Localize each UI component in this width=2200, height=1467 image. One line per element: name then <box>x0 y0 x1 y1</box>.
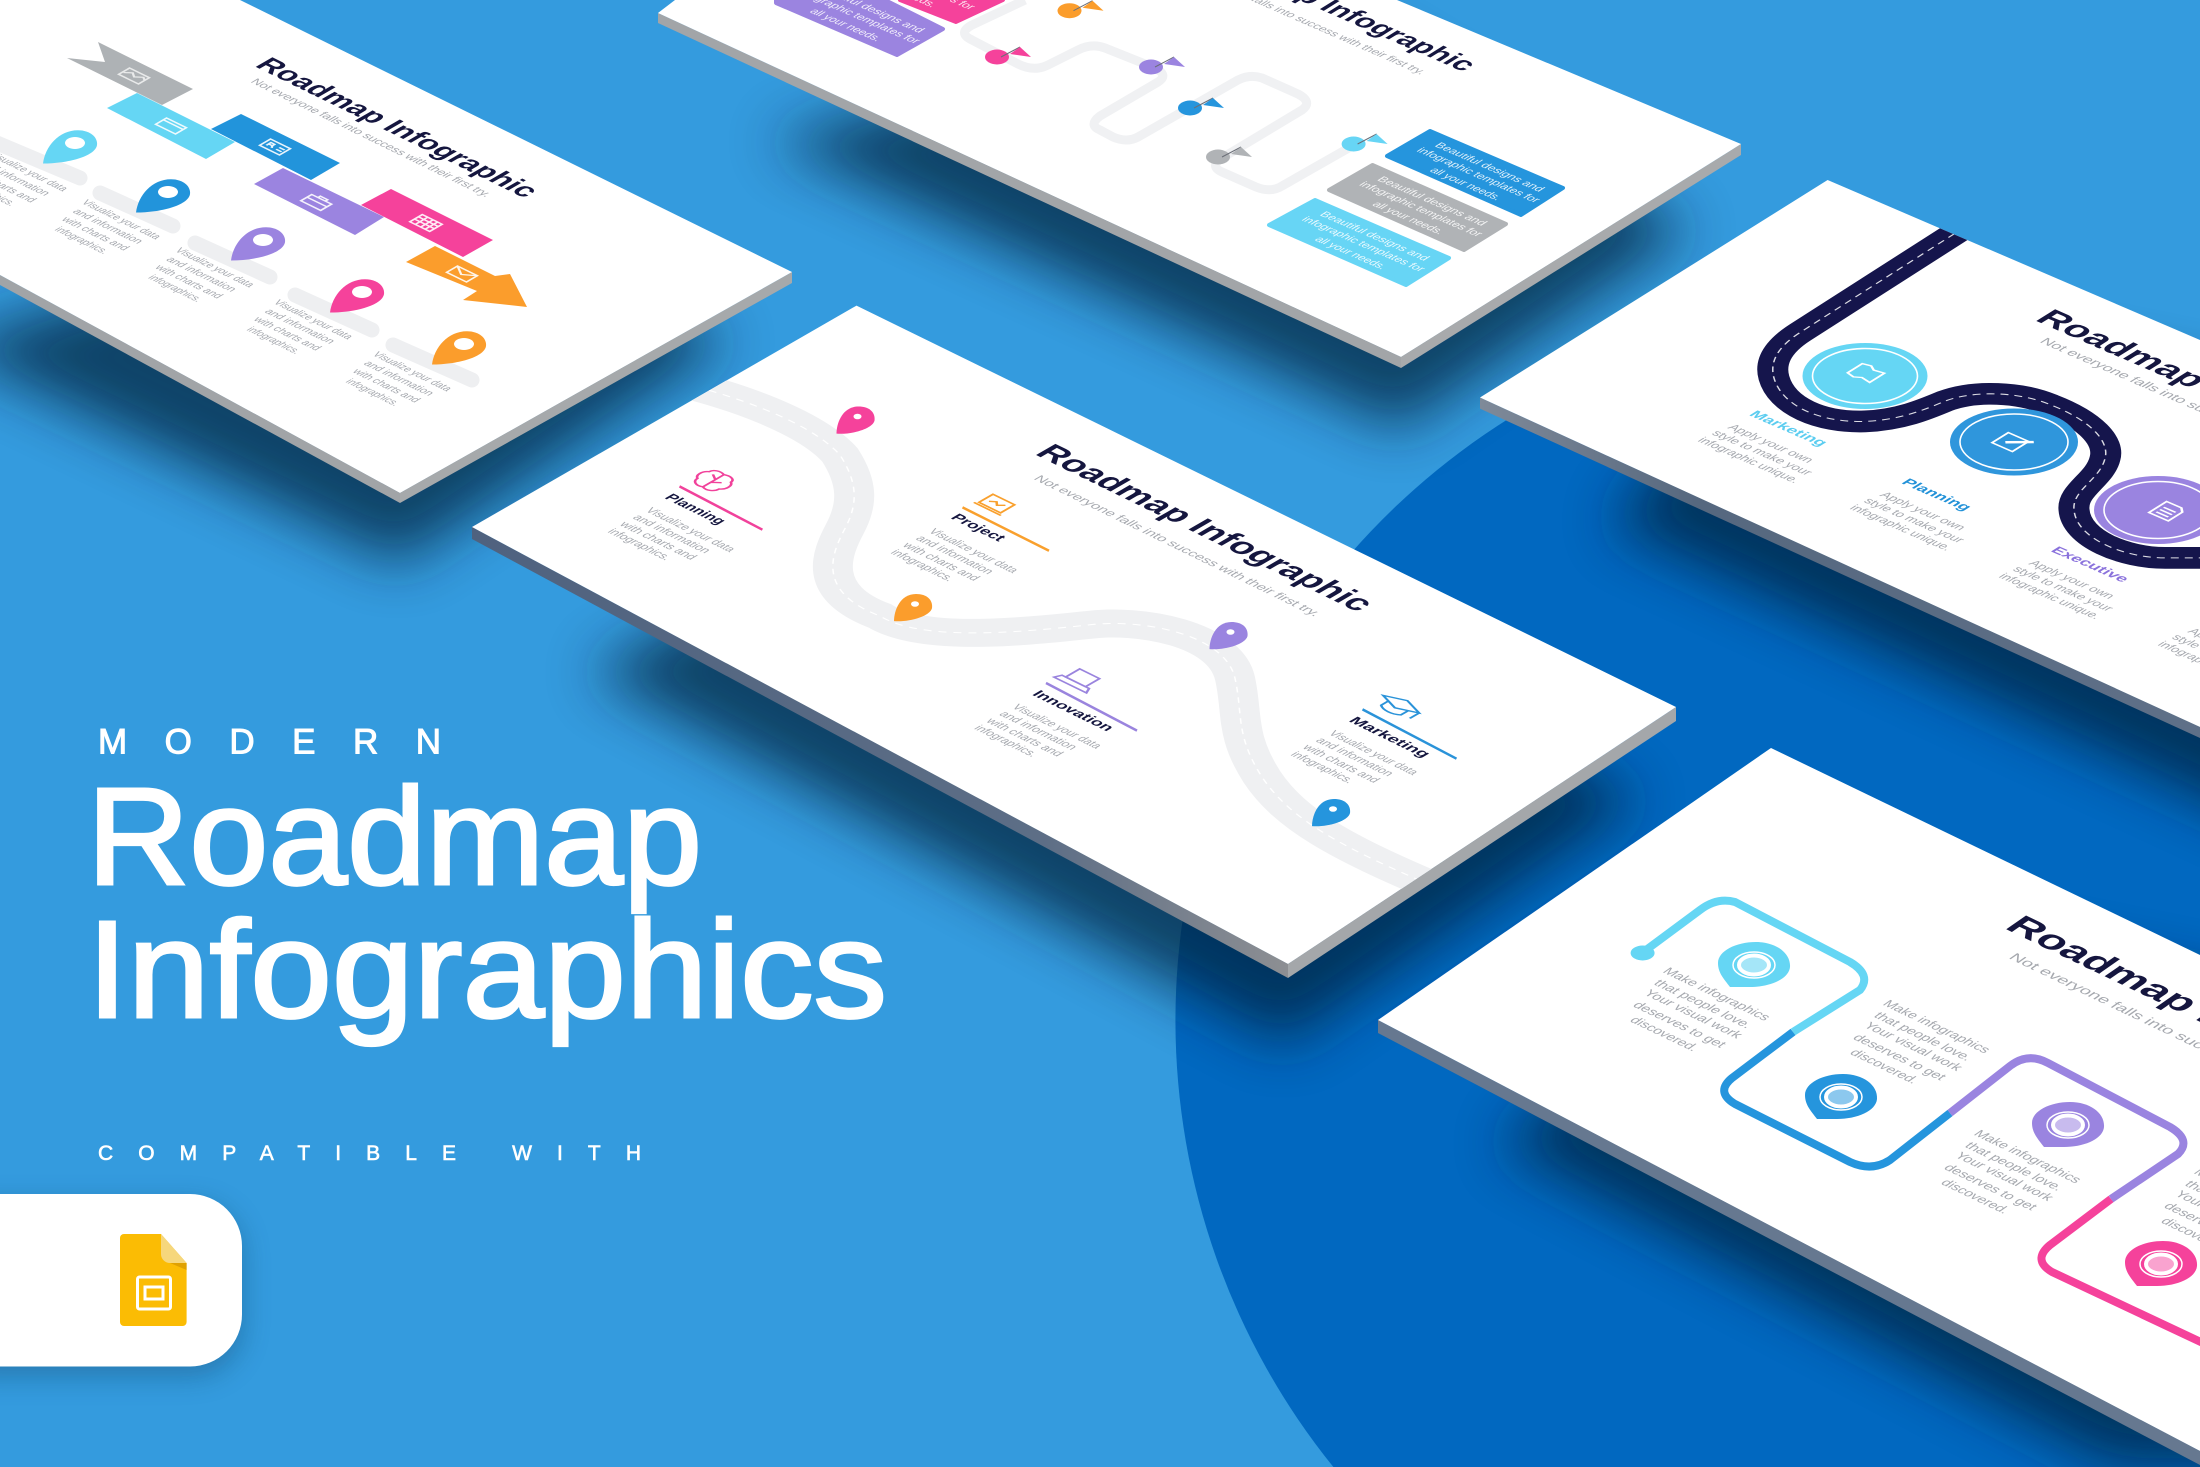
step text blocks: Visualize your data <box>370 350 456 393</box>
step text blocks: with charts and <box>58 214 133 252</box>
panel: right road slide <box>1480 180 2200 738</box>
box captions: infographic templates for <box>1356 180 1486 238</box>
step: innovation: infographics. <box>971 723 1042 759</box>
step text blocks: deserves to get <box>1630 999 1730 1050</box>
step: innovation: Innovation <box>1028 688 1118 733</box>
step labels and text: style to make your <box>2010 564 2118 613</box>
step text blocks: that people love. <box>1871 1010 1977 1063</box>
step text blocks: discovered. <box>1847 1047 1923 1086</box>
step text blocks: deserves to get <box>1941 1162 2041 1212</box>
step labels and text: infographic unique. <box>1847 503 1956 552</box>
upper text boxes <box>776 0 1003 55</box>
step text blocks: Your visual work <box>1861 1020 1967 1073</box>
step text blocks: discovered. <box>1938 1177 2014 1216</box>
step: marketing: Marketing <box>1345 715 1434 760</box>
step: project: infographics. <box>888 547 958 583</box>
step: innovation: and information <box>996 709 1081 752</box>
box captions: all your needs. <box>1369 200 1448 236</box>
step circle: marketing <box>1802 343 1928 409</box>
step: marketing: and information <box>1313 735 1398 778</box>
main title <box>87 760 887 1047</box>
box captions: Beautiful designs and <box>1317 210 1433 262</box>
step: innovation: Visualize your data <box>1009 702 1107 751</box>
step text blocks: with charts and <box>151 262 227 300</box>
box captions: Beautiful designs and <box>1374 175 1490 227</box>
box captions: Beautiful designs and <box>1432 141 1548 193</box>
step labels and text: style to make your <box>1709 428 1817 477</box>
route start dot <box>1631 946 1655 960</box>
step circle: planning <box>1950 408 2078 476</box>
step: planning: with charts and <box>616 519 701 562</box>
step text blocks: and information <box>70 207 147 246</box>
step text blocks <box>0 150 456 408</box>
step: planning: and information <box>630 512 715 555</box>
step circle: executive <box>2094 476 2200 544</box>
road pins <box>836 407 1350 826</box>
step: project: Project <box>947 512 1009 544</box>
box captions: infographic templates for <box>1299 215 1429 273</box>
step: marketing: with charts and <box>1299 742 1384 785</box>
step text blocks: Visualize your data <box>172 246 258 289</box>
dark blue circle <box>1175 311 2200 1467</box>
box captions: all your needs. <box>1427 166 1505 202</box>
step text blocks: and information <box>361 359 438 398</box>
eyebrow: modern: MODERN <box>98 722 441 762</box>
step text blocks: with charts and <box>250 314 325 352</box>
icon: google slides <box>120 1234 187 1326</box>
step text blocks: deserves to get <box>1850 1032 1950 1082</box>
step: marketing: infographics. <box>1288 749 1358 785</box>
main title: Infographics <box>87 893 887 1047</box>
box captions: infographic templates for <box>1414 146 1544 204</box>
step: innovation <box>971 666 1137 759</box>
logo card <box>0 1194 242 1366</box>
step text blocks: infographics. <box>145 273 206 304</box>
step: planning: Planning <box>661 492 730 527</box>
step labels and text: style to make your <box>1861 496 1969 545</box>
location markers <box>1718 942 2197 1286</box>
panel: center winding road slide <box>472 306 1676 978</box>
step text blocks: that people love. <box>1962 1140 2068 1193</box>
step text blocks: and information <box>262 307 339 346</box>
step text blocks: Make infographics <box>1971 1128 2086 1185</box>
step: planning <box>605 467 762 562</box>
step text blocks: with charts and <box>349 366 424 404</box>
step labels and text: Apply your own <box>1877 490 1969 532</box>
ribbon icons <box>119 68 477 282</box>
flags <box>985 1 1388 165</box>
slide subtitle: Not everyone falls into success with their first try. <box>248 77 495 199</box>
step labels and text: Executive <box>2047 545 2133 585</box>
slide surface and edges <box>1480 180 2200 738</box>
step text blocks <box>1627 965 2200 1254</box>
step text blocks: and information <box>163 255 240 294</box>
winding road <box>695 386 1440 889</box>
panel: top-left ribbon roadmap slide <box>0 0 792 503</box>
step labels and text <box>1695 409 2200 689</box>
step text blocks: that people love. <box>1651 977 1757 1030</box>
step labels and text: Apply your own <box>2026 558 2118 601</box>
step text blocks: discovered. <box>1627 1014 1703 1053</box>
slide title: Roadmap Infographic <box>1027 440 1383 616</box>
navy road <box>1773 220 2200 558</box>
winding route <box>964 0 1354 190</box>
box captions <box>794 0 1548 273</box>
step: marketing <box>1288 692 1456 785</box>
step: marketing: Visualize your data <box>1326 728 1423 777</box>
ribbon chain <box>67 42 527 307</box>
slide surface and edges <box>1378 748 2200 1465</box>
logo card shadow <box>0 1204 242 1376</box>
step text blocks: Make infographics <box>1660 965 1775 1023</box>
step labels and text: infographic unique. <box>1695 435 1804 485</box>
step text blocks: infographics. <box>244 325 305 356</box>
step: project: and information <box>913 533 998 576</box>
step: planning: infographics. <box>605 526 675 562</box>
main title: Roadmap <box>87 760 702 914</box>
box captions: all your needs. <box>1312 235 1390 271</box>
step: project: with charts and <box>899 540 984 583</box>
step text blocks: infographics. <box>52 225 113 256</box>
gray route bars <box>0 140 472 380</box>
panel: top flag roadmap slide <box>658 0 1741 368</box>
slide surface and edges <box>0 0 792 503</box>
slide title: Roadmap Infographic <box>248 54 546 202</box>
step: planning: Visualize your data <box>643 505 740 554</box>
step: project: Visualize your data <box>926 526 1023 575</box>
step text blocks: Visualize your data <box>271 298 357 341</box>
step labels and text: Planning <box>1898 477 1975 513</box>
step: project <box>888 493 1049 583</box>
slide subtitle: Not everyone falls into success with their first try. <box>1031 473 1325 618</box>
multicolour route <box>1642 901 2200 1344</box>
lower text boxes <box>1269 131 1563 285</box>
step text blocks: Your visual work <box>1641 987 1747 1041</box>
compatible with label: COMPATIBLE WITH <box>98 1142 641 1165</box>
step text blocks: Your visual work <box>1952 1150 2058 1203</box>
map pins <box>43 130 486 365</box>
step labels and text: Apply your own <box>1725 422 1817 465</box>
slide surface and edges <box>472 306 1676 978</box>
step text blocks: infographics. <box>343 377 404 408</box>
step labels and text: infographic unique. <box>1996 571 2105 621</box>
step labels and text: Marketing <box>1745 409 1831 449</box>
panel: bottom-right path slide <box>1378 748 2200 1465</box>
box captions: all your needs. <box>807 7 885 43</box>
step text blocks: Make infographics <box>1880 998 1995 1055</box>
step text blocks: Visualize your data <box>79 198 165 241</box>
step: innovation: with charts and <box>982 716 1067 758</box>
slide surface and edges <box>658 0 1741 368</box>
